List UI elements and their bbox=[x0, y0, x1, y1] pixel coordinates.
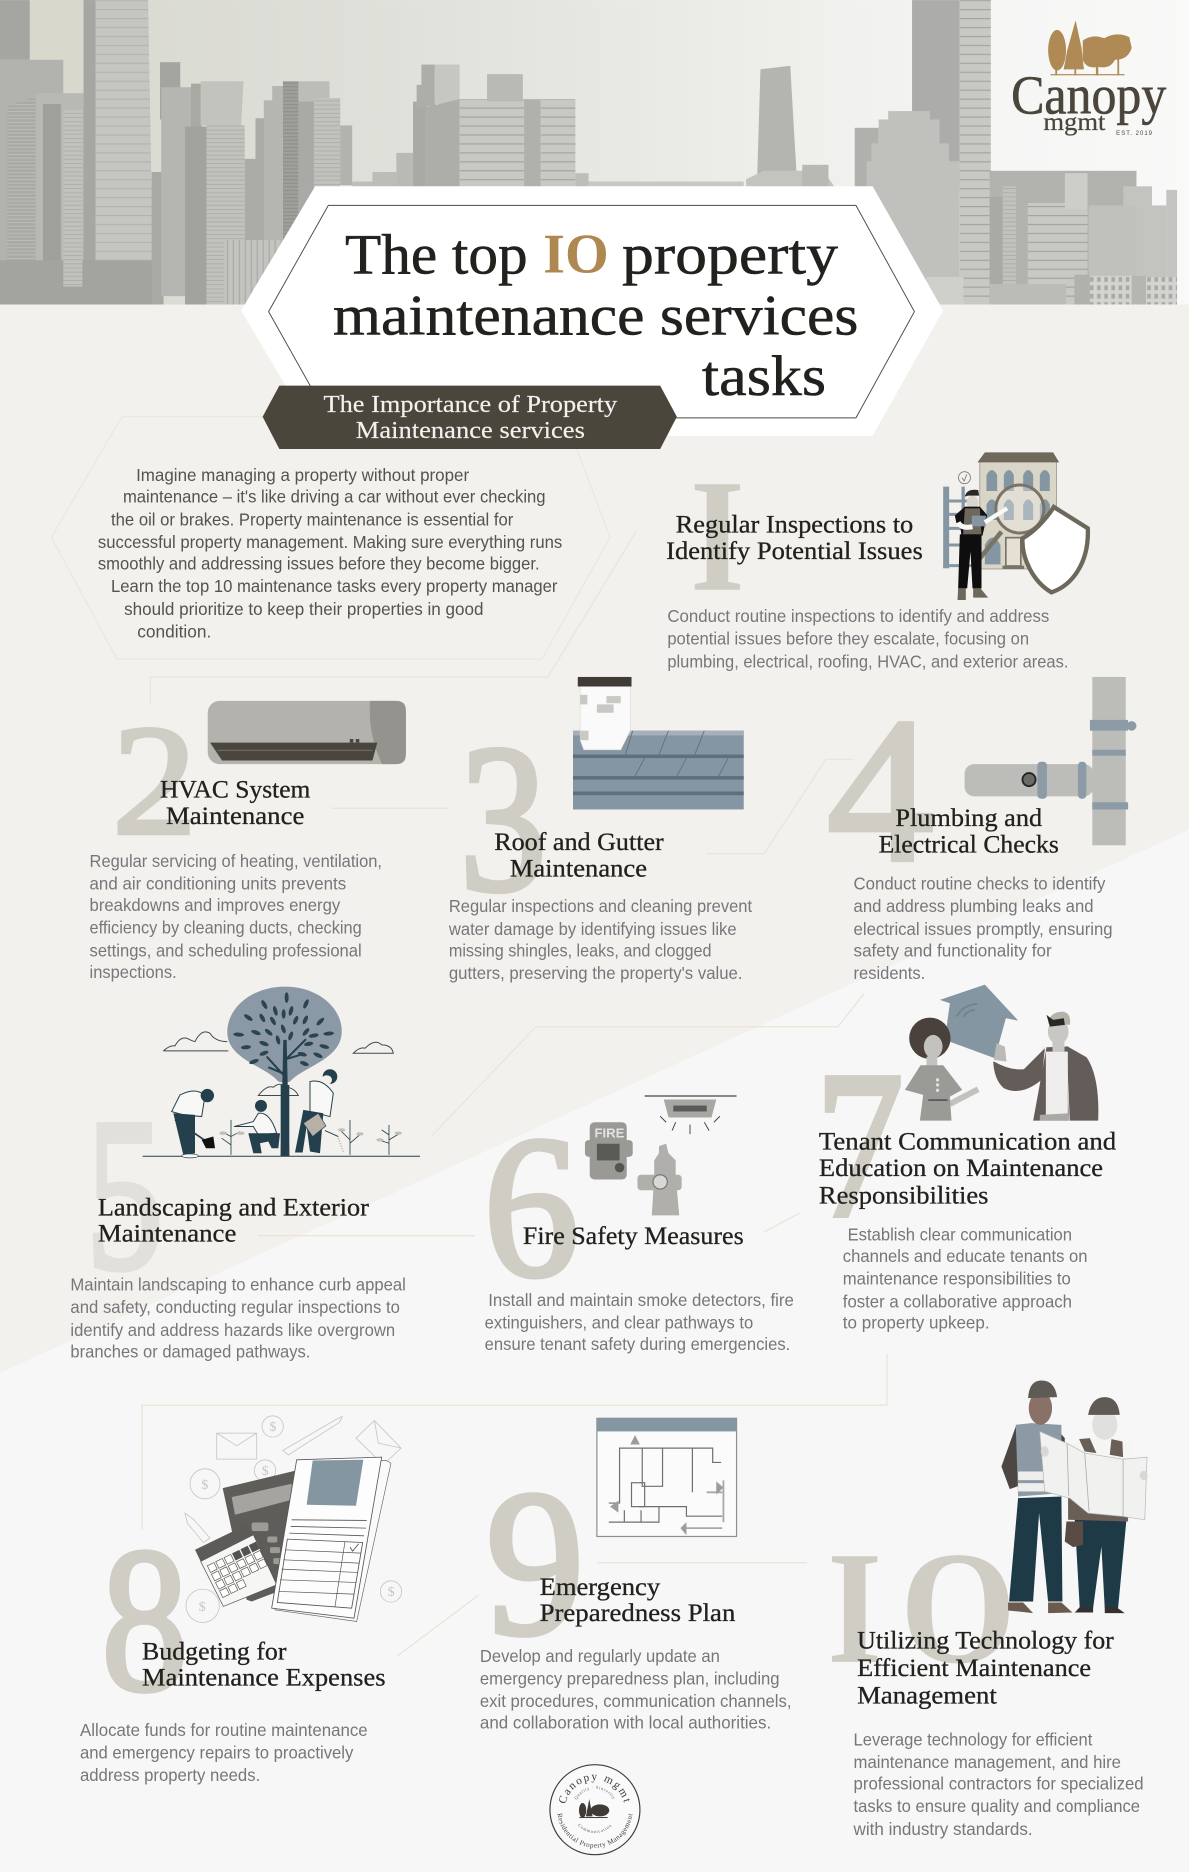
heading: Regular Inspections to bbox=[676, 510, 913, 539]
numeral 9: 9 bbox=[486, 1447, 584, 1678]
title: property bbox=[622, 223, 838, 286]
numeral 3: 3 bbox=[460, 701, 547, 935]
body text: identify and address hazards like overgrown bbox=[70, 1320, 395, 1340]
body text: missing shingles, leaks, and clogged bbox=[449, 940, 711, 960]
heading: Identify Potential Issues bbox=[666, 536, 923, 565]
heading: Plumbing and bbox=[895, 803, 1042, 832]
body text: Maintain landscaping to enhance curb appeal bbox=[70, 1275, 406, 1295]
body text: inspections. bbox=[90, 962, 177, 982]
body text bbox=[80, 1720, 368, 1785]
icon: fire alarm, hydrant, detector: FIRE bbox=[594, 1126, 625, 1141]
intro text: smoothly and addressing issues before they become bigger. bbox=[98, 554, 540, 574]
body text: Conduct routine inspections to identify and address bbox=[667, 606, 1049, 626]
heading: Management bbox=[857, 1681, 997, 1710]
body text: address property needs. bbox=[80, 1765, 260, 1785]
heading bbox=[142, 1636, 386, 1692]
intro text: condition. bbox=[137, 622, 211, 642]
heading: Electrical Checks bbox=[879, 829, 1059, 858]
heading: Emergency bbox=[540, 1572, 660, 1601]
body text bbox=[843, 1224, 1088, 1333]
banner: importance bbox=[263, 386, 677, 449]
intro text: Learn the top 10 maintenance tasks every property manager bbox=[111, 576, 558, 596]
body text: gutters, preserving the property's value. bbox=[449, 963, 743, 983]
intro text: successful property management. Making sure everything runs bbox=[98, 532, 562, 552]
heading: HVAC System bbox=[160, 775, 310, 804]
body text: breakdowns and improves energy bbox=[90, 895, 341, 915]
body text bbox=[854, 873, 1113, 983]
item 3: roof bbox=[448, 677, 752, 983]
body text: with industry standards. bbox=[853, 1819, 1033, 1839]
numeral 8: 8 bbox=[101, 1506, 188, 1735]
body text: and address plumbing leaks and bbox=[854, 896, 1093, 916]
heading: Responsibilities bbox=[819, 1180, 988, 1209]
icon: air conditioner bbox=[208, 701, 406, 764]
heading: Tenant Communication and bbox=[819, 1127, 1116, 1156]
intro text bbox=[98, 465, 562, 642]
icon: calculator, calendar, documents bbox=[185, 1416, 402, 1622]
numeral 10 bbox=[827, 1518, 1016, 1697]
body text bbox=[485, 1290, 794, 1354]
body text bbox=[90, 851, 382, 982]
body text: efficiency by cleaning ducts, checking bbox=[90, 918, 362, 938]
heading bbox=[98, 1192, 369, 1248]
body text bbox=[448, 896, 752, 983]
heading: Utilizing Technology for bbox=[857, 1626, 1114, 1655]
intro text: Imagine managing a property without proper bbox=[136, 465, 469, 485]
icon: tree and gardeners bbox=[143, 987, 420, 1158]
man with shovel bbox=[172, 1091, 205, 1117]
heading bbox=[666, 510, 923, 565]
body text: maintenance management, and hire bbox=[854, 1752, 1121, 1772]
icon: inspector, building and shield bbox=[943, 452, 1088, 600]
man with watering can bbox=[323, 1069, 337, 1084]
body text: Leverage technology for efficient bbox=[854, 1729, 1093, 1749]
title bbox=[333, 223, 858, 408]
item 9: emergency plan bbox=[480, 1418, 791, 1733]
body text: and air conditioning units prevents bbox=[90, 873, 346, 893]
numeral 5: 5 bbox=[86, 1073, 164, 1315]
body text: exit procedures, communication channels, bbox=[480, 1691, 791, 1711]
heading bbox=[160, 775, 310, 830]
heading: Preparedness Plan bbox=[540, 1598, 736, 1627]
body text: tasks to ensure quality and compliance bbox=[854, 1796, 1140, 1816]
item 5: landscaping bbox=[70, 987, 420, 1361]
body text: and emergency repairs to proactively bbox=[80, 1743, 354, 1763]
icon: calculator, calendar, documents: $ bbox=[199, 1600, 206, 1615]
icon: calculator, calendar, documents: $ bbox=[262, 1464, 269, 1479]
numeral 1: I bbox=[690, 446, 745, 625]
heading: Maintenance bbox=[98, 1219, 236, 1248]
item 4: plumbing bbox=[827, 676, 1136, 983]
icon: logo trees bbox=[1048, 20, 1132, 75]
heading: Maintenance bbox=[510, 853, 647, 882]
icon: evacuation map bbox=[597, 1418, 737, 1536]
logo: Canopy mgmt: Canopy bbox=[1011, 64, 1167, 125]
stamp logo: Quality · Sincerity bbox=[574, 1786, 615, 1800]
icon: calculator, calendar, documents: $ bbox=[201, 1478, 208, 1493]
body text: safety and functionality for bbox=[854, 940, 1052, 960]
icon: tenants and smart house bbox=[905, 985, 1098, 1121]
body text: Regular inspections and cleaning prevent bbox=[449, 896, 752, 916]
heading: Education on Maintenance bbox=[819, 1153, 1103, 1182]
heading: Budgeting for bbox=[142, 1636, 287, 1665]
numeral 6: 6 bbox=[483, 1094, 579, 1319]
plants bbox=[222, 1120, 400, 1155]
logo: Canopy mgmt: EST. 2019 bbox=[1116, 131, 1153, 137]
icon: roof with chimney bbox=[573, 677, 744, 809]
body text: settings, and scheduling professional bbox=[90, 940, 362, 960]
title hexagon bbox=[241, 186, 943, 436]
body text: potential issues before they escalate, focusing on bbox=[667, 629, 1029, 649]
body text: emergency preparedness plan, including bbox=[480, 1668, 780, 1688]
body text bbox=[667, 606, 1068, 671]
body text: ensure tenant safety during emergencies. bbox=[485, 1334, 790, 1354]
body text bbox=[480, 1646, 791, 1733]
stamp logo: Residential Property Management bbox=[557, 1813, 632, 1849]
heading: Landscaping and Exterior bbox=[98, 1192, 369, 1221]
heading: Maintenance Expenses bbox=[142, 1663, 386, 1692]
icon: two workers with plans bbox=[1001, 1380, 1148, 1613]
title: IO bbox=[543, 223, 609, 285]
body text bbox=[70, 1275, 406, 1361]
woman planting bbox=[255, 1100, 267, 1112]
stamp logo bbox=[549, 1764, 640, 1856]
stamp logo: Communication bbox=[578, 1824, 612, 1833]
banner: importance: Maintenance services bbox=[356, 417, 585, 444]
banner: importance: The Importance of Property bbox=[324, 391, 618, 418]
icon: fire alarm, hydrant, detector bbox=[585, 1096, 737, 1215]
heading bbox=[494, 827, 664, 882]
icon: calculator, calendar, documents: $ bbox=[269, 1420, 276, 1435]
title: The top bbox=[345, 223, 528, 286]
item 10: technology bbox=[827, 1380, 1148, 1839]
title: maintenance services bbox=[333, 284, 858, 347]
heading bbox=[857, 1626, 1114, 1710]
icon: pipes bbox=[965, 677, 1136, 845]
body text: and collaboration with local authorities. bbox=[480, 1713, 771, 1733]
body text: branches or damaged pathways. bbox=[70, 1341, 310, 1361]
intro text: maintenance – it's like driving a car without ever checking bbox=[123, 487, 546, 507]
intro text: should prioritize to keep their properties in good bbox=[124, 599, 483, 619]
heading bbox=[819, 1127, 1116, 1209]
heading: Fire Safety Measures bbox=[523, 1221, 744, 1250]
numeral 10: I bbox=[827, 1518, 882, 1697]
connector lines bbox=[142, 531, 887, 1656]
body text: professional contractors for specialized bbox=[854, 1774, 1144, 1794]
body text: Establish clear communication bbox=[848, 1224, 1072, 1244]
body text: plumbing, electrical, roofing, HVAC, and exterior areas. bbox=[667, 651, 1068, 671]
body text: to property upkeep. bbox=[843, 1313, 990, 1333]
body text: water damage by identifying issues like bbox=[448, 919, 737, 939]
intro text: the oil or brakes. Property maintenance is essential for bbox=[111, 509, 514, 529]
body text: residents. bbox=[854, 963, 925, 983]
item 2: HVAC bbox=[90, 694, 406, 982]
icon: calculator, calendar, documents: $ bbox=[388, 1585, 395, 1600]
item 6: fire safety bbox=[483, 1094, 794, 1354]
item 8: budgeting bbox=[80, 1416, 402, 1785]
body text: electrical issues promptly, ensuring bbox=[854, 919, 1113, 939]
numeral 4: 4 bbox=[827, 676, 934, 905]
body text bbox=[853, 1729, 1144, 1839]
intro hexagon outline bbox=[51, 417, 610, 659]
numeral 10: O bbox=[900, 1519, 1016, 1697]
body text: channels and educate tenants on bbox=[843, 1246, 1088, 1266]
heading bbox=[540, 1572, 736, 1627]
header skyline bbox=[0, 0, 1189, 304]
stamp logo: Canopy mgmt bbox=[559, 1774, 630, 1803]
numeral 2: 2 bbox=[112, 694, 197, 868]
body text: maintenance responsibilities to bbox=[843, 1269, 1071, 1289]
heading: Efficient Maintenance bbox=[857, 1653, 1091, 1682]
logo: Canopy mgmt: mgmt bbox=[1043, 109, 1105, 136]
item 7: tenant communication bbox=[815, 985, 1116, 1333]
body text: Install and maintain smoke detectors, fire bbox=[488, 1290, 794, 1310]
body text: Regular servicing of heating, ventilation, bbox=[90, 851, 382, 871]
heading: Maintenance bbox=[166, 801, 304, 830]
title: tasks bbox=[702, 345, 826, 408]
numeral 7: 7 bbox=[815, 1028, 904, 1261]
logo: Canopy mgmt bbox=[1011, 20, 1167, 137]
body text: foster a collaborative approach bbox=[843, 1291, 1072, 1311]
body text: Allocate funds for routine maintenance bbox=[80, 1720, 368, 1740]
body text: Conduct routine checks to identify bbox=[854, 873, 1106, 893]
body text: extinguishers, and clear pathways to bbox=[485, 1313, 753, 1333]
heading: Roof and Gutter bbox=[494, 827, 664, 856]
body text: Develop and regularly update an bbox=[480, 1646, 720, 1666]
item 1: inspections bbox=[666, 446, 1088, 671]
heading bbox=[879, 803, 1059, 858]
body text: and safety, conducting regular inspections to bbox=[70, 1297, 400, 1317]
